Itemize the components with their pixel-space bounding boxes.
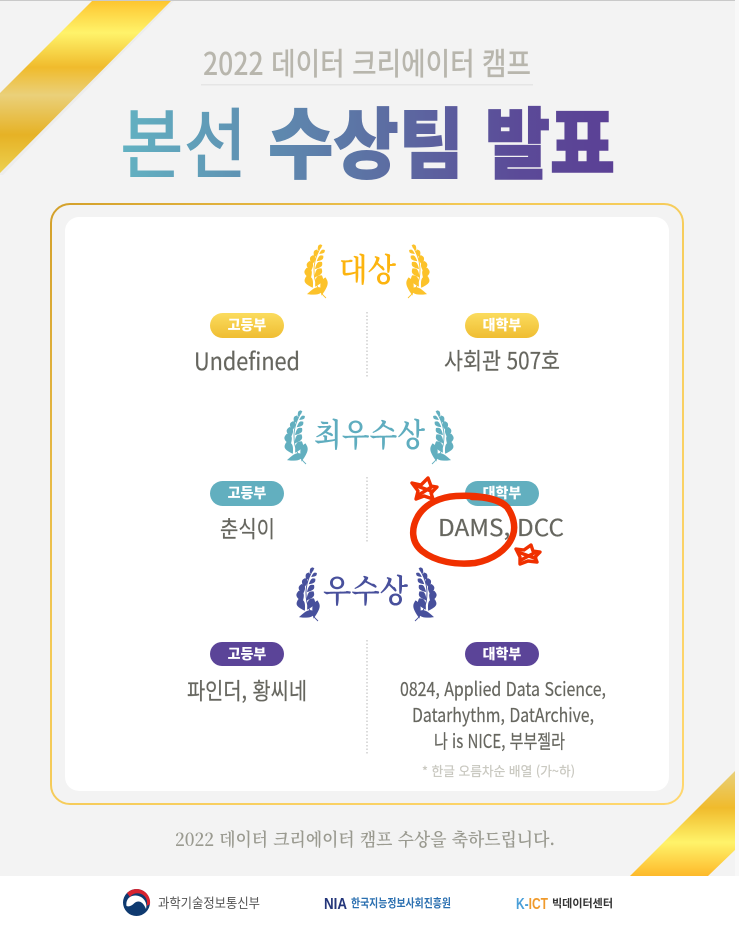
badge: high school (210, 642, 284, 666)
subtitle: 2022 데이터 크리에이터 캠프 (203, 39, 531, 84)
heading: top excellence prize: 최우수상 (314, 410, 425, 456)
winners: university: 0824, Applied Data Science, (400, 675, 606, 702)
badge: university: 대학부 (483, 483, 521, 503)
badge: university (465, 642, 539, 666)
title: 수상팀 (268, 84, 464, 195)
icon: gold laurel left (303, 244, 329, 298)
annotation: red star top (412, 478, 437, 499)
title: 발표 (485, 84, 615, 195)
logo: ministry of science and ICT (123, 889, 260, 916)
winner: high school: 춘식이 (220, 510, 275, 544)
logo: K-ICT big data center: K-ICT (516, 896, 548, 913)
badge: high school: 고등부 (228, 315, 266, 335)
panel: awards frame (51, 204, 683, 804)
winner: high school: 파인더, 황씨네 (187, 672, 307, 706)
icon: teal laurel left (283, 410, 309, 464)
logo: NIA: 한국지능정보사회진흥원 (351, 895, 451, 911)
badge: university (465, 313, 539, 338)
heading: grand prize: 대상 (339, 245, 396, 291)
logo: ministry of science and ICT: 과학기술정보통신부 (158, 892, 260, 912)
winners: university (400, 675, 606, 754)
annotation: red star bottom (516, 545, 540, 564)
logo: K-ICT big data center (516, 895, 613, 913)
winners: university: 나 is NICE, 부부젤라 (434, 727, 565, 754)
section: top excellence prize (210, 410, 564, 544)
winner: high school: Undefined (194, 342, 300, 377)
icon: gold laurel right (405, 244, 431, 298)
badge: high school (210, 481, 284, 506)
footer message: 2022 데이터 크리에이터 캠프 수상을 축하드립니다. (175, 826, 555, 852)
title (120, 84, 615, 195)
icon: navy laurel left (295, 567, 321, 621)
badge: high school (210, 313, 284, 338)
badge: high school: 고등부 (228, 644, 266, 664)
winner: university: DAMS, DCC (438, 509, 564, 543)
title: 본선 (120, 84, 247, 195)
heading: excellence prize: 우수상 (323, 566, 408, 612)
badge: university: 대학부 (483, 644, 521, 664)
icon: taegeuk emblem (123, 889, 150, 916)
logo: NIA (324, 895, 451, 913)
gold ribbon: top left (0, 1, 174, 175)
section: grand prize (194, 244, 560, 377)
section: excellence prize (187, 566, 606, 780)
icon: teal laurel right (429, 410, 455, 464)
badge: university (465, 481, 539, 506)
badge: high school: 고등부 (228, 483, 266, 503)
winner: university: 사회관 507호 (444, 342, 560, 376)
icon: navy laurel right (412, 567, 438, 621)
logo: K-ICT big data center: 빅데이터센터 (552, 895, 613, 911)
note: sort order: * 한글 오름차순 배열 (가~하) (422, 761, 575, 780)
badge: university: 대학부 (483, 315, 521, 335)
logo: NIA: NIA (324, 896, 347, 913)
footer band (0, 876, 739, 929)
winners: university: Datarhythm, DatArchive, (412, 701, 594, 728)
gold ribbon: bottom right (630, 771, 735, 876)
annotation: red hand-drawn circle (413, 496, 514, 564)
